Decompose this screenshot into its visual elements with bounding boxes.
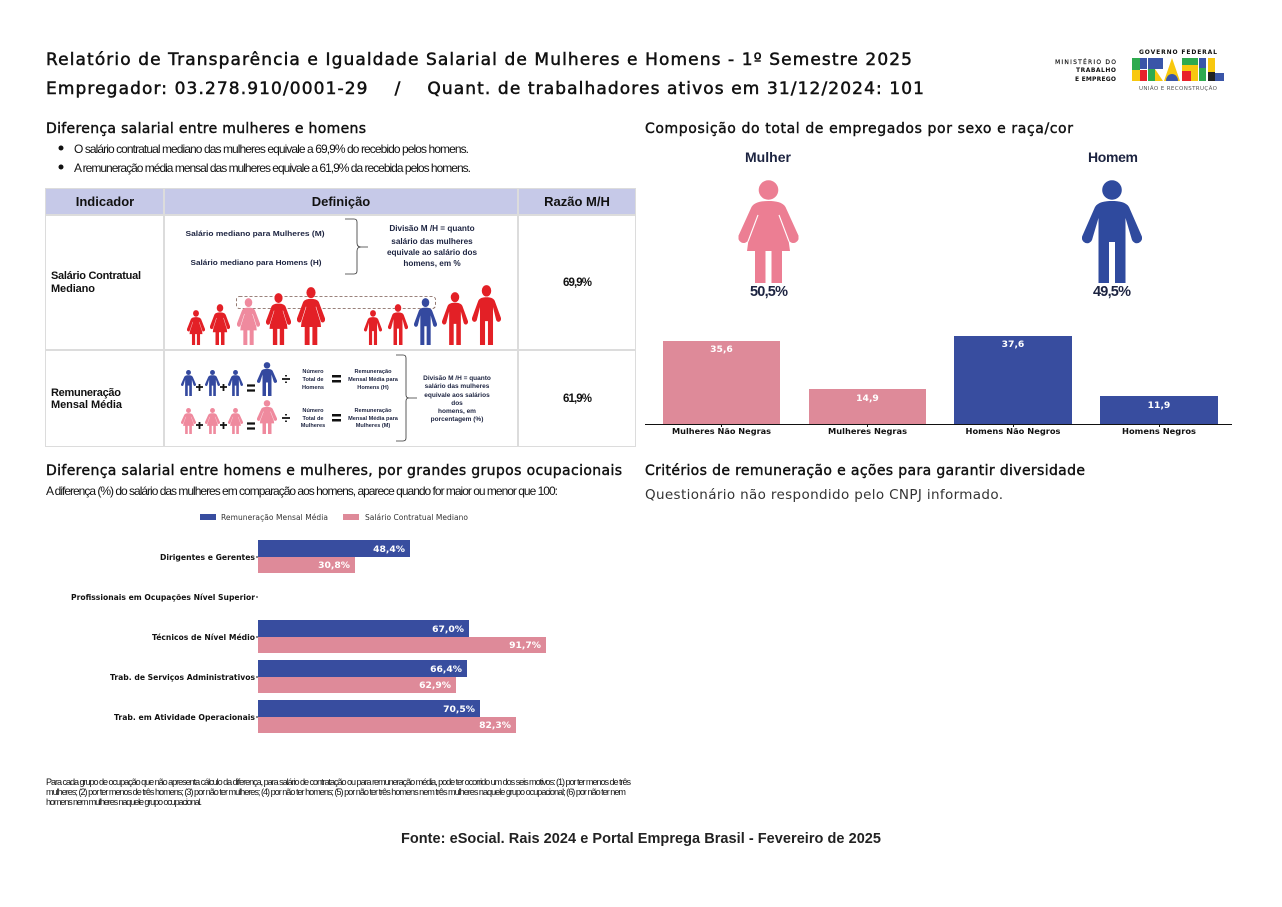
bar chart: grupos ocupacionais: 70,5%	[443, 704, 475, 715]
source: Fonte: eSocial. Rais 2024 e Portal Emprega Brasil - Fevereiro de 2025	[401, 831, 881, 847]
title: Relatório de Transparência e Igualdade Salarial de Mulheres e Homens - 1º Semestre 2025	[46, 50, 912, 70]
diagram: remuneração média	[181, 355, 491, 441]
bar chart: composição por sexo e raça/cor: Mulheres Não Negras	[672, 427, 771, 436]
logo: ministério e governo federal	[1055, 49, 1224, 92]
bar chart: grupos ocupacionais: 66,4%	[430, 664, 462, 675]
logo: ministério e governo federal: MINISTÉRIO DO	[1055, 58, 1116, 66]
icon: homem 49,5%: 49,5%	[1093, 284, 1131, 300]
bar chart: composição por sexo e raça/cor: Homens Não Negros	[966, 427, 1061, 436]
diagram: remuneração média: Mensal Média para	[348, 377, 399, 383]
diagram: remuneração média: Remuneração	[354, 369, 392, 375]
diagram: remuneração média: Remuneração	[354, 408, 392, 414]
bullets: resumo salarial: A remuneração média mensal das mulheres equivale a 61,9% da recebida pelos homens.	[74, 161, 471, 175]
logo: ministério e governo federal: GOVERNO FEDERAL	[1139, 49, 1217, 56]
table: indicadores: Mediano	[51, 283, 95, 295]
bar chart: composição por sexo e raça/cor: 37,6	[1002, 339, 1024, 350]
diagram: salário mediano: Divisão M /H = quanto	[389, 224, 475, 233]
bar chart: grupos ocupacionais: Profissionais em Ocupações Nível Superior	[71, 593, 255, 602]
legend	[200, 513, 468, 522]
text: nota do gráfico: A diferença (%) do salário das mulheres em comparação aos homens, aparece quando for maior ou menor que 100:	[46, 484, 558, 498]
diagram: salário mediano: salário das mulheres	[391, 237, 473, 246]
diagram: salário mediano: Salário mediano para Mulheres (M)	[186, 229, 325, 238]
diagram: remuneração média: Mulheres (M)	[356, 423, 390, 429]
bar chart: composição por sexo e raça/cor: Mulheres Negras	[828, 427, 907, 436]
bar chart: grupos ocupacionais: Trab. de Serviços Administrativos	[110, 673, 255, 682]
diagram: remuneração média: Mulheres	[301, 423, 325, 429]
bar chart: grupos ocupacionais: 91,7%	[509, 640, 541, 651]
logo: ministério e governo federal: E EMPREGO	[1075, 76, 1116, 83]
bar chart: grupos ocupacionais: 62,9%	[419, 680, 451, 691]
heading: critérios: Critérios de remuneração e ações para garantir diversidade	[645, 463, 1085, 479]
diagram: salário mediano: Salário mediano para Homens (H)	[190, 258, 322, 267]
legend: Salário Contratual Mediano	[365, 513, 468, 522]
diagram: salário mediano: equivale ao salário dos	[387, 248, 477, 257]
icon: mulher 50,5%: Mulher	[745, 149, 792, 165]
bar chart: grupos ocupacionais: 30,8%	[318, 560, 350, 571]
diagram: remuneração média: porcentagem (%)	[431, 416, 483, 423]
diagram: remuneração média: dos	[451, 400, 463, 407]
table: indicadores: 69,9%	[563, 277, 592, 289]
diagram: salário mediano: homens, em %	[403, 259, 461, 268]
diagram: remuneração média: homens, em	[438, 408, 476, 415]
table: indicadores: Mensal Média	[51, 399, 123, 411]
table: indicadores	[45, 188, 636, 447]
table: indicadores: 61,9%	[563, 393, 592, 405]
table: indicadores: Definição	[312, 194, 370, 209]
bar chart: composição por sexo e raça/cor	[645, 336, 1232, 436]
text: questionário: Questionário não respondido pelo CNPJ informado.	[645, 487, 1003, 503]
icon: mulher 50,5%	[738, 149, 799, 300]
legend: Remuneração Mensal Média	[221, 513, 328, 522]
icon: homem 49,5%	[1082, 149, 1142, 300]
logo: ministério e governo federal: TRABALHO	[1076, 67, 1116, 74]
diagram: remuneração média: equivale aos salários	[424, 392, 490, 399]
bar chart: grupos ocupacionais: 48,4%	[373, 544, 405, 555]
logo: ministério e governo federal: UNIÃO E RECONSTRUÇÃO	[1139, 85, 1218, 92]
footnote: Para cada grupo de ocupação que não apresenta cálculo da diferença, para salário de contratação ou para remuneração média, pode ter ocorrido um dos seis motivos: (1) por ter menos de três	[46, 777, 631, 787]
bar chart: grupos ocupacionais: Técnicos de Nível Médio	[152, 632, 255, 642]
heading: grupos ocupacionais: Diferença salarial entre homens e mulheres, por grandes grupos ocupacionais	[46, 463, 622, 479]
heading: diferença salarial: Diferença salarial entre mulheres e homens	[46, 121, 366, 137]
bullets: resumo salarial	[58, 142, 471, 175]
title: Empregador: 03.278.910/0001-29 / Quant. de trabalhadores ativos em 31/12/2024: 101	[46, 79, 924, 99]
diagram: remuneração média: Homens	[302, 385, 324, 391]
bar chart: composição por sexo e raça/cor: 11,9	[1148, 400, 1170, 411]
table: indicadores: Salário Contratual	[51, 270, 141, 282]
table: indicadores: Indicador	[76, 194, 134, 209]
heading: composição: Composição do total de empregados por sexo e raça/cor	[645, 121, 1073, 137]
diagram: remuneração média: Número	[302, 369, 324, 375]
diagram: remuneração média: Número	[302, 408, 324, 414]
bar chart: grupos ocupacionais	[71, 540, 546, 733]
diagram: salário mediano	[186, 219, 501, 345]
table: indicadores: Razão M/H	[544, 194, 610, 209]
footnote: homens nem mulheres naquele grupo ocupacional.	[46, 797, 202, 807]
bar chart: composição por sexo e raça/cor: Homens Negros	[1122, 427, 1196, 436]
title	[46, 50, 924, 99]
bar chart: composição por sexo e raça/cor: 35,6	[710, 344, 733, 355]
diagram: remuneração média: Mensal Média para	[348, 416, 399, 422]
table: indicadores: Remuneração	[51, 387, 121, 399]
diagram: remuneração média: Total de	[302, 416, 324, 422]
diagram: remuneração média: Homens (H)	[357, 385, 389, 391]
icon: mulher 50,5%: 50,5%	[750, 284, 788, 300]
icon: homem 49,5%: Homem	[1088, 149, 1138, 165]
diagram: remuneração média: Total de	[302, 377, 324, 383]
diagram: remuneração média: salário das mulheres	[425, 383, 490, 390]
bar chart: grupos ocupacionais: Trab. em Atividade Operacionais	[114, 713, 255, 722]
bar chart: grupos ocupacionais: Dirigentes e Gerentes	[160, 553, 255, 562]
bullets: resumo salarial: O salário contratual mediano das mulheres equivale a 69,9% do recebido pelos homens.	[74, 142, 469, 156]
bar chart: composição por sexo e raça/cor: 14,9	[856, 393, 879, 404]
diagram: remuneração média: Divisão M /H = quanto	[423, 375, 491, 382]
footnote: mulheres; (2) por ter menos de três homens; (3) por não ter mulheres; (4) por não ter homens; (5) por não ter três homens nem três mulheres naquele grupo ocupacional; (6) por não ter nem	[46, 787, 626, 797]
bar chart: grupos ocupacionais: 67,0%	[432, 624, 464, 635]
bar chart: grupos ocupacionais: 82,3%	[479, 720, 511, 731]
footnote	[46, 777, 631, 807]
